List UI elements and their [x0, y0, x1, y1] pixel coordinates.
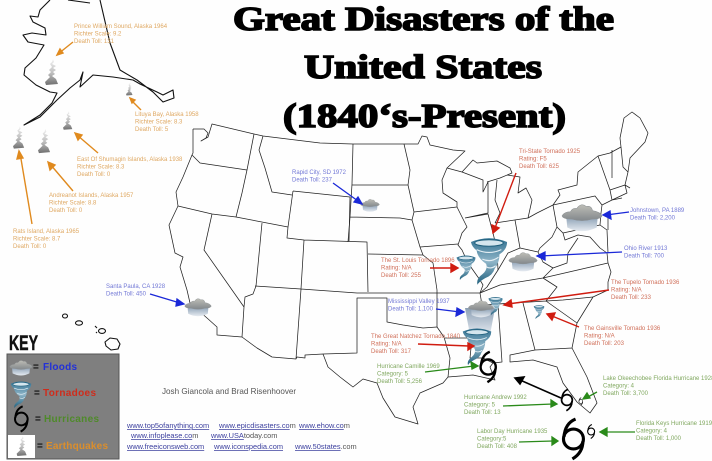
source links: www.iconspedia.com	[213, 442, 283, 451]
key: earthquakes: =	[37, 441, 43, 452]
earthquake labels	[13, 24, 199, 250]
key: hurricanes: =	[35, 414, 41, 425]
hurricane labels	[377, 364, 712, 450]
earthquake labels: Death Toll: 0	[77, 172, 111, 178]
key: tornadoes: Tornadoes	[43, 388, 96, 399]
source links: m	[290, 421, 296, 430]
flood labels: Death Toll: 2,200	[630, 216, 676, 222]
title: United States	[304, 49, 542, 86]
tornado labels: The Great Natchez Tornado 1840	[371, 334, 460, 340]
hurricane arrows	[425, 362, 635, 445]
flood arrows	[150, 183, 629, 316]
tornado labels: Rating: N/A	[584, 334, 615, 340]
tornado labels: The Tupelo Tornado 1936	[611, 280, 679, 286]
hurricane labels: Death Toll: 5,256	[377, 379, 423, 385]
hurricane labels: Death Toll: 408	[477, 444, 518, 450]
tornado labels: Rating: N/A	[381, 266, 412, 272]
tornado labels: The St. Louis Tornado 1896	[381, 258, 455, 264]
key: tornadoes	[11, 382, 96, 408]
map: Alaska outline	[23, 0, 174, 125]
earthquake labels: Death Toll: 0	[49, 208, 83, 214]
tornado labels	[371, 149, 680, 355]
tornado labels: Tri-State Tornado 1925	[519, 149, 580, 155]
earthquake arrows	[17, 42, 141, 224]
tornado labels: The Gainsville Tornado 1936	[584, 326, 660, 332]
flood labels: Rapid City, SD 1972	[292, 170, 346, 176]
earthquake labels: Richter Scale: 8.7	[13, 236, 61, 242]
hurricane labels: Category: 4	[636, 428, 668, 434]
source links: www.50states	[294, 442, 341, 451]
source links: .com	[341, 442, 357, 451]
tornado labels: Death Toll: 255	[381, 273, 422, 279]
hurricane labels: Death Toll: 13	[464, 410, 501, 416]
hurricane labels: Labor Day Hurricane 1935	[477, 429, 547, 435]
flood labels: Santa Paula, CA 1928	[106, 284, 165, 290]
key: earthquakes: Earthquakes	[46, 441, 108, 452]
earthquake labels: Andreanot Islands, Alaska 1957	[49, 193, 133, 199]
title	[233, 1, 614, 135]
hurricane labels: Lake Okeechobee Florida Hurricane 1928	[603, 376, 712, 382]
key: tornadoes: =	[34, 388, 40, 399]
hurricane labels: Hurricane Camille 1969	[377, 364, 440, 370]
flood labels: Death Toll: 1,100	[388, 306, 434, 312]
source links: www.epicdisasters.co	[218, 421, 290, 430]
tornado labels: Rating: N/A	[371, 342, 402, 348]
earthquake icons	[13, 59, 132, 153]
hurricane labels: Category: 4	[603, 384, 635, 390]
hurricane labels: Category:5	[477, 436, 507, 442]
title: (1840‘s-Present)	[283, 98, 566, 135]
earthquake labels: Rats Island, Alaska 1965	[13, 229, 79, 235]
map: Hawaii islands	[62, 314, 120, 350]
earthquake labels: Prince William Sound, Alaska 1964	[74, 24, 167, 30]
key: floods	[10, 360, 77, 376]
source links: www.infoplease.co	[130, 431, 192, 440]
earthquake labels: Richter Scale: 8.3	[77, 164, 125, 170]
key: earthquakes	[8, 435, 108, 458]
source links: www.top5ofanything.com	[126, 421, 209, 430]
source links: www.USA	[210, 431, 244, 440]
key: hurricanes: Hurricanes	[44, 414, 99, 425]
earthquake labels: Death Toll: 131	[74, 39, 115, 45]
earthquake labels: Richter Scale: 9.2	[74, 32, 122, 38]
flood labels: Mississippi Valley 1937	[388, 299, 450, 305]
earthquake labels: Death Toll: 0	[13, 244, 47, 250]
flood labels: Ohio River 1913	[624, 246, 667, 252]
source links: m	[192, 431, 198, 440]
tornado labels: Death Toll: 317	[371, 349, 412, 355]
flood labels: Johnstown, PA 1889	[630, 208, 684, 214]
tornado labels: Rating: F5	[519, 156, 547, 162]
earthquake labels: Richter Scale: 8.8	[49, 200, 97, 206]
source links	[126, 421, 357, 451]
earthquake labels: Lituya Bay, Alaska 1958	[135, 112, 199, 118]
earthquake labels: Richter Scale: 8.3	[135, 120, 183, 126]
source links: m	[344, 421, 350, 430]
hurricane labels: Florida Keys Hurricane 1919	[636, 421, 712, 427]
tornado icons	[456, 238, 544, 365]
hurricane labels: Death Toll: 3,700	[603, 391, 649, 397]
hurricane labels: Death Toll: 1,000	[636, 436, 682, 442]
hurricane icons	[481, 352, 595, 459]
arrow: black hurricane path	[515, 377, 561, 398]
earthquake labels: East Of Shumagin Islands, Alaska 1938	[77, 157, 182, 163]
earthquake labels: Death Toll: 5	[135, 127, 169, 133]
title: Great Disasters of the	[233, 1, 614, 38]
source links: www.freeiconsweb.com	[126, 442, 204, 451]
map: contiguous United States	[169, 112, 648, 424]
panel: key	[7, 332, 119, 459]
source links: www.ehow.co	[298, 421, 344, 430]
flood labels: Death Toll: 700	[624, 254, 665, 260]
key box	[7, 354, 119, 459]
tornado labels: Rating: N/A	[611, 288, 642, 294]
hurricane labels: Category: 5	[377, 372, 409, 378]
tornado labels: Death Toll: 203	[584, 341, 625, 347]
key heading: KEY	[9, 332, 38, 355]
tornado arrows	[418, 173, 609, 350]
hurricane labels: Hurricane Andrew 1992	[464, 395, 527, 401]
flood labels: Death Toll: 237	[292, 178, 333, 184]
source links: today.com	[244, 431, 277, 440]
key: floods: =	[33, 362, 39, 373]
hurricane labels: Category: 5	[464, 402, 496, 408]
tornado labels: Death Toll: 233	[611, 295, 652, 301]
key: hurricanes	[15, 406, 99, 432]
flood labels: Death Toll: 450	[106, 292, 147, 298]
author credit: Josh Giancola and Brad Risenhoover	[162, 387, 296, 396]
flood icons	[185, 199, 602, 335]
flood labels	[106, 170, 685, 312]
tornado labels: Death Toll: 625	[519, 164, 560, 170]
key: floods: Floods	[43, 362, 77, 373]
